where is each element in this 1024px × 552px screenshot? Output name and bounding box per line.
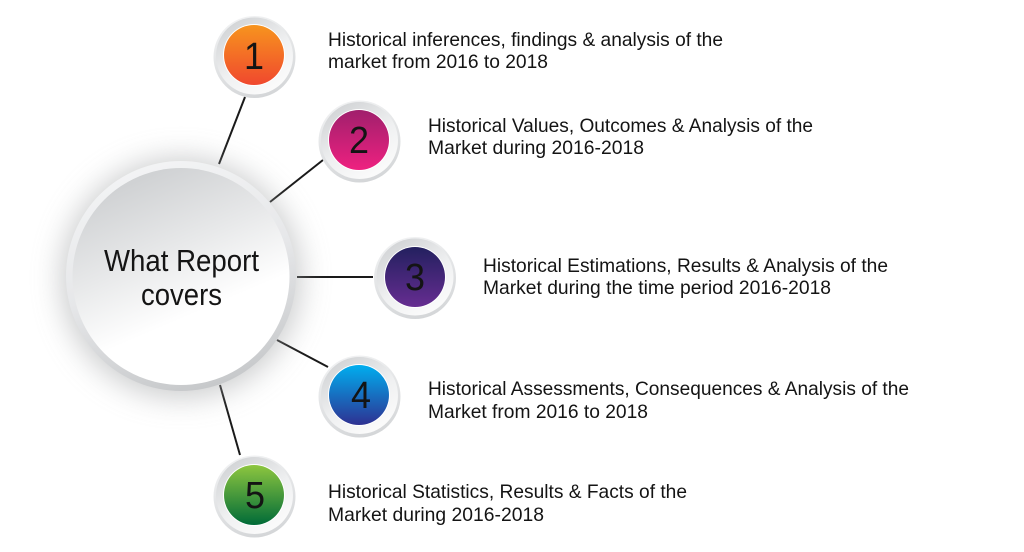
node 3: 3 bbox=[405, 257, 425, 299]
node 5 bbox=[214, 456, 296, 538]
node 1: 1 bbox=[244, 36, 264, 78]
text 4 bbox=[428, 378, 909, 423]
text 3: Market during the time period 2016-2018 bbox=[483, 277, 831, 299]
text 4: Historical Assessments, Consequences & Analysis of the bbox=[428, 378, 909, 400]
central label bbox=[104, 243, 259, 312]
text 2: Historical Values, Outcomes & Analysis of the bbox=[428, 115, 813, 137]
node 4 bbox=[318, 356, 400, 438]
node 2 bbox=[318, 100, 400, 182]
node 4: 4 bbox=[351, 375, 371, 417]
text 1 bbox=[328, 29, 723, 73]
text 5: Historical Statistics, Results & Facts of the bbox=[328, 481, 687, 503]
text 4: Market from 2016 to 2018 bbox=[428, 401, 648, 423]
text 1: market from 2016 to 2018 bbox=[328, 51, 548, 73]
node 1 bbox=[214, 16, 296, 98]
text 1: Historical inferences, findings & analysis of the bbox=[328, 29, 723, 51]
text 2: Market during 2016-2018 bbox=[428, 137, 644, 159]
node 2: 2 bbox=[349, 120, 369, 162]
central label: What Report bbox=[104, 243, 259, 278]
text 3 bbox=[483, 255, 888, 299]
connector lines bbox=[219, 97, 373, 455]
text 5 bbox=[328, 481, 687, 526]
central circle bbox=[62, 159, 300, 397]
text 3: Historical Estimations, Results & Analysis of the bbox=[483, 255, 888, 277]
central label: covers bbox=[141, 277, 222, 312]
node 5: 5 bbox=[245, 475, 265, 517]
text 2 bbox=[428, 115, 813, 159]
text 5: Market during 2016-2018 bbox=[328, 504, 544, 526]
node 3 bbox=[374, 237, 456, 319]
